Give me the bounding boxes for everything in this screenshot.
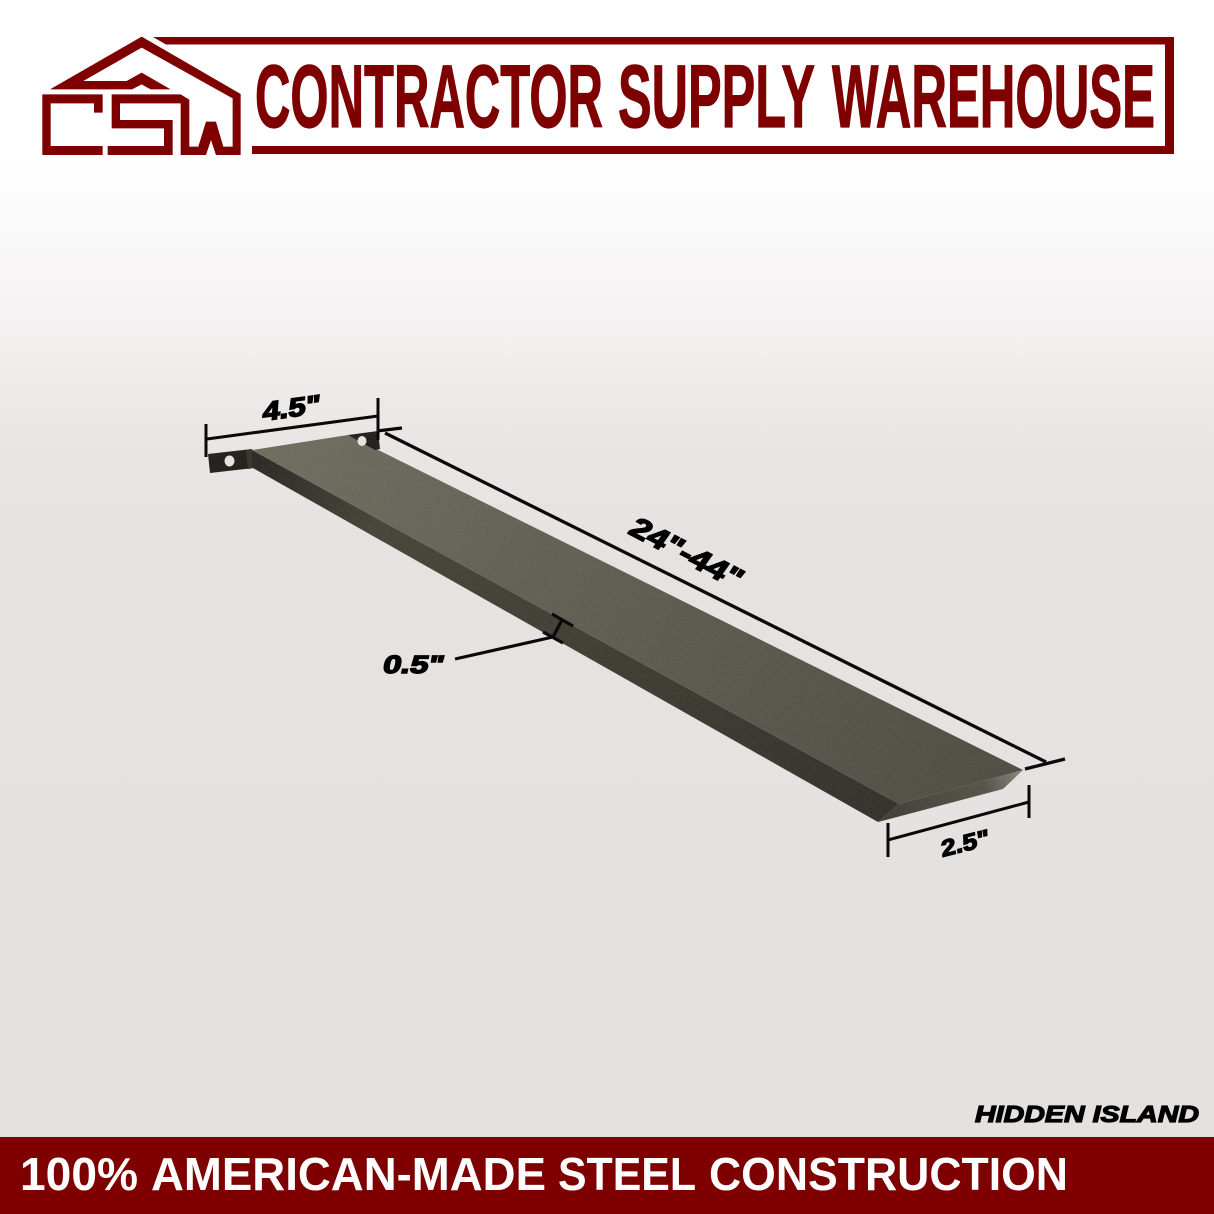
bevelled end <box>878 770 1023 822</box>
dimension: 4.5 inch width: 4.5" <box>262 390 321 427</box>
company name: CONTRACTOR <box>255 46 603 146</box>
footer slogan: AMERICAN-MADE <box>151 1148 546 1200</box>
dimension: 2.5 inch end width <box>888 785 1029 863</box>
left mounting tab <box>208 449 254 473</box>
dimension: 2.5 inch end width: 2.5" <box>940 825 990 863</box>
header frame <box>153 37 1174 154</box>
footer slogan: CONSTRUCTION <box>709 1148 1068 1200</box>
footer slogan: 100% <box>20 1148 138 1200</box>
product name label: HIDDEN ISLAND <box>975 1101 1199 1127</box>
side face <box>252 450 899 822</box>
dimension: 0.5 inch thickness <box>380 614 573 679</box>
footer slogan <box>20 1148 1068 1200</box>
dimension: 0.5 inch thickness: 0.5" <box>380 652 447 679</box>
header: company logo and name <box>42 37 1174 155</box>
dimension: 24 to 44 inch length <box>377 428 1065 769</box>
footer banner <box>0 1137 1214 1214</box>
company name: SUPPLY <box>618 46 815 146</box>
logo: CSW house icon <box>42 37 241 155</box>
footer slogan: STEEL <box>558 1148 696 1200</box>
product: steel bracket plank <box>208 430 1030 830</box>
steel surface grain <box>252 450 1015 821</box>
dimension: 24 to 44 inch length: 24"-44" <box>623 511 750 594</box>
dimension: 4.5 inch width <box>206 390 378 457</box>
top face <box>252 435 1023 804</box>
footer band <box>0 1137 1214 1214</box>
right mounting tab <box>348 431 380 450</box>
